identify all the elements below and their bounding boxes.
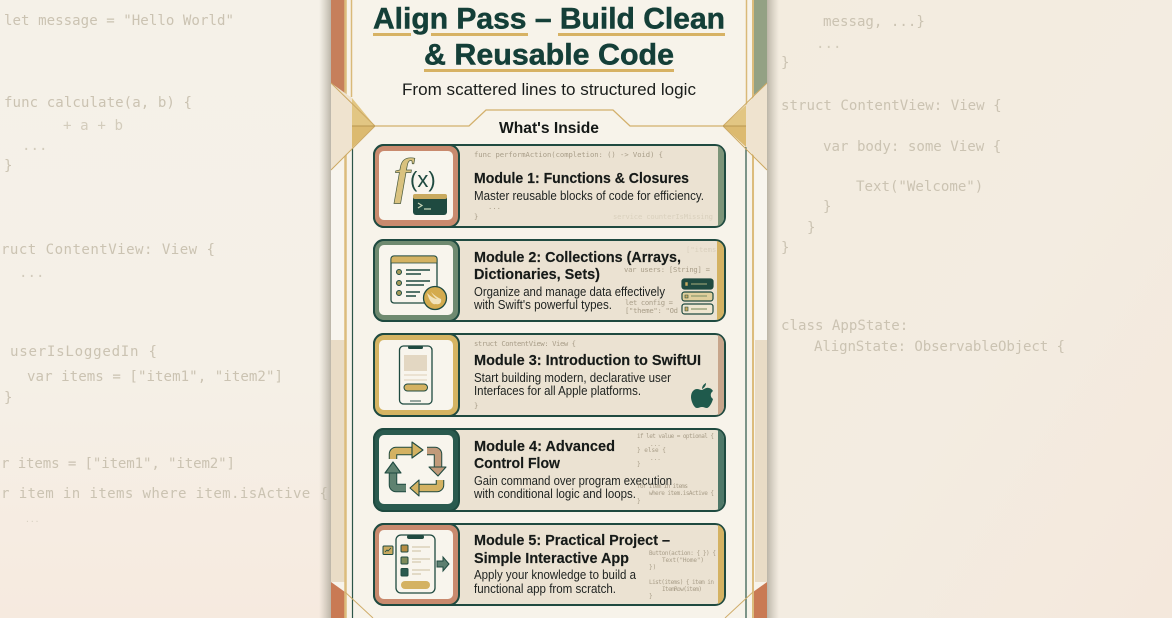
module title: Module 5: Practical Project – bbox=[474, 532, 670, 549]
background code: right: var body: some View { bbox=[823, 139, 1001, 155]
right edge stripes bbox=[753, 0, 767, 618]
poster shadows bbox=[319, 0, 779, 618]
accent band bbox=[718, 430, 724, 510]
module 1 card bbox=[374, 145, 725, 227]
module description bbox=[473, 474, 672, 501]
module description bbox=[474, 371, 671, 398]
code lines: let config = bbox=[625, 298, 674, 307]
code lines: for item in items bbox=[637, 483, 688, 490]
code lines bbox=[637, 433, 714, 505]
module description: functional app from scratch. bbox=[474, 582, 616, 596]
card body bbox=[374, 334, 725, 416]
accent band bbox=[718, 525, 724, 604]
code lines bbox=[649, 550, 716, 600]
background code: left bbox=[1, 13, 328, 524]
icon tile bbox=[374, 334, 459, 416]
icon: f(x) with terminal: f bbox=[394, 148, 415, 204]
code lines: } bbox=[474, 212, 478, 221]
module title: Simple Interactive App bbox=[474, 550, 629, 567]
code lines: ... bbox=[650, 455, 661, 462]
frame lines bbox=[346, 0, 753, 618]
code lines: }) bbox=[649, 564, 656, 571]
title: Align Pass – Build Clean bbox=[373, 2, 725, 36]
accent band bbox=[718, 335, 724, 415]
background code: left: ... bbox=[19, 265, 44, 281]
background code: right: } bbox=[807, 220, 816, 236]
code lines bbox=[624, 245, 716, 315]
title: & Reusable Code bbox=[424, 38, 674, 72]
background code: right: ... bbox=[816, 36, 841, 52]
module description bbox=[474, 568, 636, 596]
module title: Control Flow bbox=[474, 455, 560, 472]
icon tile bbox=[374, 524, 459, 605]
card body bbox=[374, 145, 725, 227]
module title: Module 1: Functions & Closures bbox=[474, 170, 689, 187]
module title: Dictionaries, Sets) bbox=[474, 266, 600, 283]
module description: with conditional logic and loops. bbox=[473, 487, 636, 501]
code lines: where item.isActive { bbox=[649, 490, 714, 497]
background code: left: userIsLoggedIn { bbox=[10, 344, 157, 360]
icon tile bbox=[374, 145, 459, 227]
icon: cycle arrows bbox=[379, 435, 453, 504]
background code: right bbox=[781, 14, 1065, 355]
module title bbox=[474, 438, 615, 472]
background code: left: func calculate(a, b) { bbox=[4, 95, 192, 111]
code lines bbox=[474, 339, 576, 410]
background code: left: r item in items where item.isActive { bbox=[1, 486, 328, 502]
code lines: List(items) { item in bbox=[649, 579, 714, 586]
background code: left: r items = ["item1", "item2"] bbox=[1, 456, 235, 472]
background: right paper bbox=[767, 0, 1172, 618]
background code: left: ... bbox=[25, 515, 39, 524]
code lines: var users: [String] = bbox=[624, 265, 711, 274]
code lines bbox=[474, 150, 713, 221]
icon tile bbox=[374, 429, 459, 511]
code lines: if let value = optional { bbox=[637, 433, 714, 440]
accent band bbox=[718, 146, 724, 226]
module title bbox=[474, 249, 681, 283]
left edge stripes bbox=[331, 0, 345, 618]
icon: server stack bbox=[682, 279, 713, 314]
background code: left: ruct ContentView: View { bbox=[1, 242, 215, 258]
background code: right: struct ContentView: View { bbox=[781, 98, 1002, 114]
code lines: } bbox=[474, 401, 478, 410]
module description: with Swift's powerful types. bbox=[473, 298, 612, 312]
icon: phone UI bbox=[379, 340, 453, 410]
code lines: ItemRow(item) bbox=[662, 586, 702, 593]
heading: What's Inside: What's Inside bbox=[499, 120, 599, 137]
code lines: service counterIsMissing bbox=[613, 212, 713, 221]
background code: left: + a + b bbox=[63, 118, 123, 134]
icon: f(x) with terminal: (x) bbox=[410, 167, 436, 192]
module title bbox=[474, 532, 670, 567]
module description: Apply your knowledge to build a bbox=[474, 568, 636, 582]
card body bbox=[374, 429, 725, 511]
module title: Module 3: Introduction to SwiftUI bbox=[474, 352, 701, 369]
heading frame bbox=[375, 110, 723, 126]
background code: right: } bbox=[781, 55, 790, 71]
accent band bbox=[717, 241, 724, 320]
background code: right: } bbox=[781, 240, 790, 256]
module title: Module 2: Collections (Arrays, bbox=[474, 249, 681, 266]
background code: left: ... bbox=[22, 138, 47, 154]
title bbox=[373, 2, 725, 72]
background code: right: Text("Welcome") bbox=[856, 179, 983, 195]
corner rule lines bbox=[345, 592, 753, 618]
code lines: ... bbox=[488, 202, 501, 211]
code lines: ... bbox=[650, 441, 661, 448]
code lines: struct ContentView: View { bbox=[474, 339, 576, 348]
icon: apple logo bbox=[691, 383, 713, 408]
code lines: ["items bbox=[686, 245, 716, 254]
subtitle: From scattered lines to structured logic bbox=[402, 80, 696, 99]
module 3 card bbox=[374, 334, 725, 416]
card body bbox=[374, 524, 725, 605]
code lines: } bbox=[637, 498, 641, 505]
module description: Gain command over program execution bbox=[474, 474, 672, 488]
background code: left: let message = "Hello World" bbox=[4, 13, 234, 29]
icon: f(x) with terminal bbox=[379, 148, 453, 220]
background code: left: } bbox=[4, 158, 12, 174]
left diamond ornament bbox=[331, 83, 375, 170]
code lines: } bbox=[649, 593, 653, 600]
poster panel bbox=[331, 0, 767, 618]
code lines: ["theme": "Od bbox=[625, 306, 678, 315]
code lines: Button(action: { }) { bbox=[649, 550, 716, 557]
code lines: } bbox=[637, 461, 641, 468]
background code: right: AlignState: ObservableObject { bbox=[814, 339, 1065, 355]
icon: app phone with arrow bbox=[379, 530, 453, 599]
module description: Interfaces for all Apple platforms. bbox=[474, 384, 641, 398]
background code: right: class AppState: bbox=[781, 318, 908, 334]
module description: Start building modern, declarative user bbox=[474, 371, 671, 385]
code lines: Text("Home") bbox=[662, 557, 704, 564]
background code: left: var items = ["item1", "item2"] bbox=[27, 369, 283, 385]
code lines: func performAction(completion: () -> Void) { bbox=[474, 150, 663, 159]
background code: left: } bbox=[4, 390, 12, 406]
module title: Module 4: Advanced bbox=[474, 438, 615, 455]
icon tile bbox=[374, 240, 459, 321]
background: left paper bbox=[0, 0, 331, 618]
module description: Organize and manage data effectively bbox=[474, 285, 666, 299]
title underlines bbox=[373, 33, 725, 72]
card body bbox=[374, 240, 725, 321]
background code: right: } bbox=[823, 199, 832, 215]
icon: checklist with swift badge bbox=[379, 245, 453, 315]
right diamond ornament bbox=[723, 83, 767, 170]
code lines: } else { bbox=[637, 447, 666, 454]
module 2 card bbox=[374, 240, 725, 321]
module 5 card bbox=[374, 524, 725, 605]
module 4 card bbox=[374, 429, 725, 511]
background code: right: messag, ...} bbox=[823, 14, 925, 30]
module description bbox=[473, 285, 666, 312]
module description: Master reusable blocks of code for efficiency. bbox=[474, 189, 704, 203]
